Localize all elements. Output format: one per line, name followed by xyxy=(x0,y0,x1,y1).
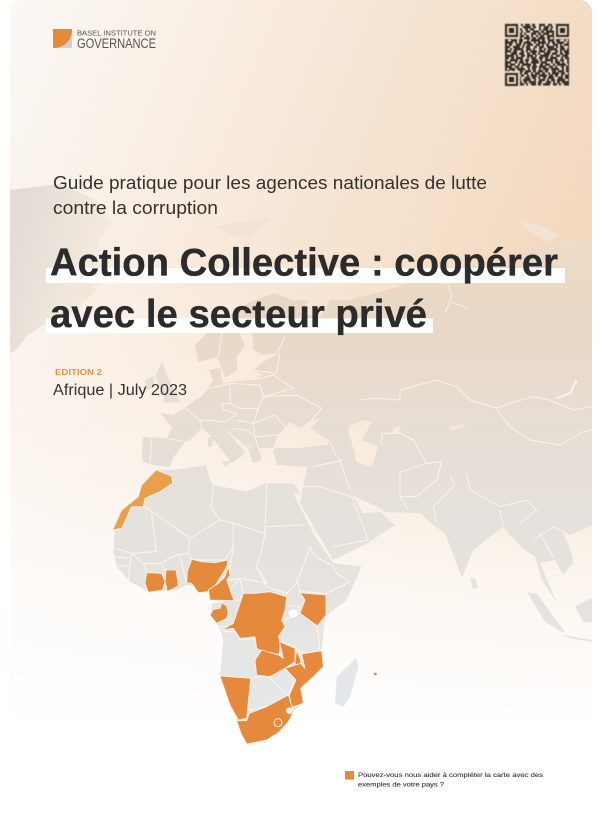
Côte d'Ivoire xyxy=(145,573,165,592)
logo xyxy=(53,29,156,51)
legend xyxy=(345,771,543,788)
legend text: exemples de votre pays ? xyxy=(358,782,445,788)
Morocco and Western Sahara xyxy=(113,470,173,530)
logo mark xyxy=(53,29,72,48)
edition label: EDITION 2 xyxy=(55,367,102,377)
Mauritius xyxy=(374,673,377,675)
Cameroon xyxy=(208,567,234,601)
map: Africa xyxy=(113,465,377,744)
Kenya xyxy=(300,593,326,626)
Ghana xyxy=(165,570,178,591)
Zambia xyxy=(255,642,295,677)
logo name: BASEL INSTITUTE ON xyxy=(77,30,156,38)
title: avec le secteur privé xyxy=(50,293,427,336)
subtitle: contre la corruption xyxy=(53,198,218,218)
Malawi xyxy=(294,650,302,664)
Mozambique xyxy=(285,651,323,707)
world map xyxy=(10,184,592,744)
title highlight bars xyxy=(46,268,565,333)
Lesotho outline xyxy=(274,719,282,727)
Africa landmass xyxy=(113,465,362,744)
date: Afrique | July 2023 xyxy=(53,382,187,399)
title: Action Collective : coopérer xyxy=(50,242,558,284)
map: Russian and Mongolian borders and inland water xyxy=(360,285,592,445)
Africa borders xyxy=(113,467,350,710)
Eswatini xyxy=(286,707,293,714)
orange countries xyxy=(113,470,377,744)
legend text xyxy=(358,772,543,788)
heading text block xyxy=(46,173,565,399)
Nigeria xyxy=(187,559,228,593)
Gabon xyxy=(210,603,228,623)
Lake Victoria xyxy=(289,609,298,617)
Namibia xyxy=(220,676,251,720)
QR code xyxy=(504,23,570,87)
map: European borders xyxy=(150,333,337,463)
DR Congo xyxy=(222,592,287,657)
logo name: GOVERNANCE xyxy=(77,36,156,51)
legend swatch xyxy=(345,771,354,780)
subtitle: Guide pratique pour les agences nationales de lutte xyxy=(53,173,487,193)
South Africa xyxy=(237,695,293,744)
legend text: Pouvez-vous nous aider à compléter la carte avec des xyxy=(358,772,543,779)
subtitle xyxy=(53,173,487,218)
map: Greenland and Iceland xyxy=(10,184,112,353)
logo name xyxy=(77,30,156,51)
map: Asian borders xyxy=(300,433,573,560)
map: Europe and Asia xyxy=(142,217,592,642)
Madagascar xyxy=(335,658,358,707)
title xyxy=(50,242,558,336)
